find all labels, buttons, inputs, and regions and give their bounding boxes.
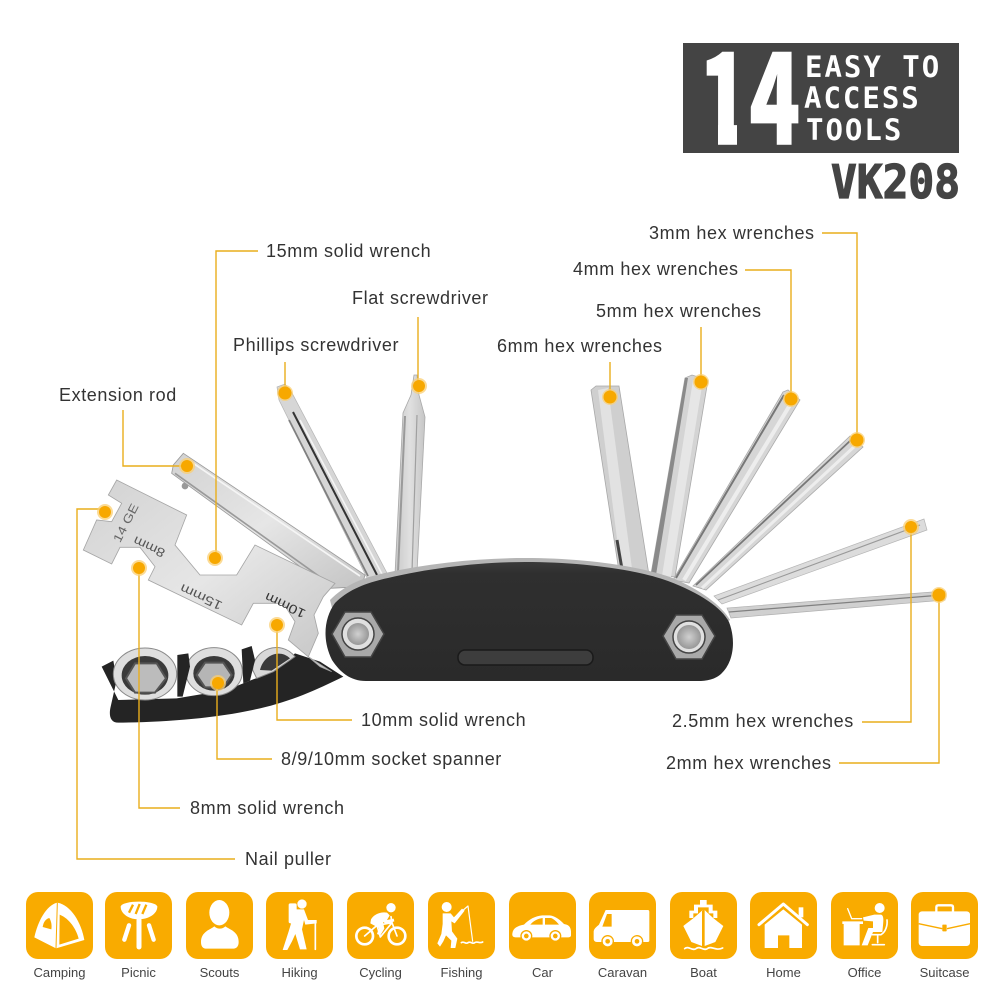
callout: 2.5mm hex wrenches: [672, 519, 919, 731]
icon: picnic grill: Picnic: [121, 965, 156, 980]
icon: home: [750, 892, 817, 980]
tool: 3mm hex wrench: [693, 436, 863, 590]
callout: 4mm hex wrenches: 4mm hex wrenches: [573, 259, 739, 279]
badge: 14 easy to access tools: EASY TO: [805, 50, 941, 84]
right bolt: [663, 615, 715, 659]
icon: home: Home: [766, 965, 801, 980]
tool: wrench plate: 14 GE: [110, 501, 142, 545]
tool: 2.5mm hex wrench: [714, 519, 927, 604]
icon: boat: [670, 892, 737, 980]
callout: 2mm hex wrenches: 2mm hex wrenches: [666, 753, 832, 773]
tool: 5mm hex wrench: [651, 375, 708, 577]
callout: Extension rod: [59, 385, 195, 474]
callout: 8mm solid wrench: [131, 560, 345, 818]
callout: 5mm hex wrenches: 5mm hex wrenches: [596, 301, 762, 321]
callout: 4mm hex wrenches: [573, 259, 799, 407]
tool: flat screwdriver: [395, 375, 425, 574]
callout: 10mm solid wrench: [269, 617, 526, 730]
callout: Flat screwdriver: [352, 288, 489, 394]
callout: 3mm hex wrenches: 3mm hex wrenches: [649, 223, 815, 243]
icon: suitcase: Suitcase: [920, 965, 969, 980]
icon: office: Office: [848, 965, 881, 980]
callout: 3mm hex wrenches: [649, 223, 865, 448]
callout: 10mm solid wrench: 10mm solid wrench: [361, 710, 526, 730]
tool: black handle body: [326, 558, 733, 681]
callout: 8/9/10mm socket spanner: 8/9/10mm socket spanner: [281, 749, 502, 769]
icon: fishing: Fishing: [441, 965, 482, 980]
badge: 14 easy to access tools: ACCESS: [804, 81, 921, 115]
callout: 8/9/10mm socket spanner: [210, 675, 502, 769]
callout: 8mm solid wrench: 8mm solid wrench: [190, 798, 345, 818]
model number: VK208: [831, 155, 960, 209]
tool: 2mm hex wrench: [727, 591, 945, 618]
tool: 6mm hex wrench: [591, 386, 649, 578]
callout: Phillips screwdriver: Phillips screwdriver: [233, 335, 399, 355]
callout: Nail puller: Nail puller: [245, 849, 332, 869]
callout: Nail puller: [77, 504, 332, 869]
callout: 6mm hex wrenches: 6mm hex wrenches: [497, 336, 663, 356]
tool: 4mm hex wrench: [673, 390, 800, 583]
icon: hiking: [266, 892, 333, 980]
callout: 2.5mm hex wrenches: 2.5mm hex wrenches: [672, 711, 854, 731]
icon: car: [509, 892, 576, 980]
callout: Flat screwdriver: Flat screwdriver: [352, 288, 489, 308]
icon: picnic grill: [105, 892, 172, 980]
callout: 2mm hex wrenches: [666, 587, 947, 773]
tool: extension rod: [172, 453, 365, 588]
tool: wrench plate: 8mm: [131, 533, 167, 560]
icon: caravan van: Caravan: [598, 965, 647, 980]
icon: camping: [26, 892, 93, 980]
icon: scouts person: Scouts: [200, 965, 240, 980]
callout: 15mm solid wrench: 15mm solid wrench: [266, 241, 431, 261]
icon: boat: Boat: [690, 965, 717, 980]
icon: office: [831, 892, 898, 980]
tool: wrench plate: 15mm: [178, 581, 225, 613]
icon: caravan van: [589, 892, 656, 980]
tool: wrench plate: [83, 480, 335, 672]
icon: fishing: [428, 892, 495, 980]
callout: 5mm hex wrenches: [596, 301, 762, 390]
multi-tool illustration: [83, 375, 945, 723]
icon: cycling: [347, 892, 414, 980]
badge: 14 easy to access tools: 14: [699, 0, 800, 181]
icon: cycling: Cycling: [359, 965, 402, 980]
callout: Phillips screwdriver: [233, 335, 399, 401]
icon: suitcase: [911, 892, 978, 980]
callout: 15mm solid wrench: [207, 241, 431, 566]
tool: socket holder with 8/9/10mm sockets: [102, 646, 343, 723]
icon: camping: Camping: [33, 965, 86, 980]
slot in handle: [458, 650, 593, 665]
callout: Extension rod: Extension rod: [59, 385, 177, 405]
icon: car: Car: [532, 965, 554, 980]
tool: Phillips screwdriver: [277, 384, 387, 578]
icon: scouts person: [186, 892, 253, 980]
icon: hiking: Hiking: [281, 965, 318, 980]
badge: 14 easy to access tools: TOOLS: [806, 113, 903, 147]
badge: 14 easy to access tools: [683, 0, 959, 181]
tool: wrench plate: 10mm: [263, 590, 308, 621]
left bolt: [332, 612, 384, 657]
callout: 6mm hex wrenches: [497, 336, 663, 405]
